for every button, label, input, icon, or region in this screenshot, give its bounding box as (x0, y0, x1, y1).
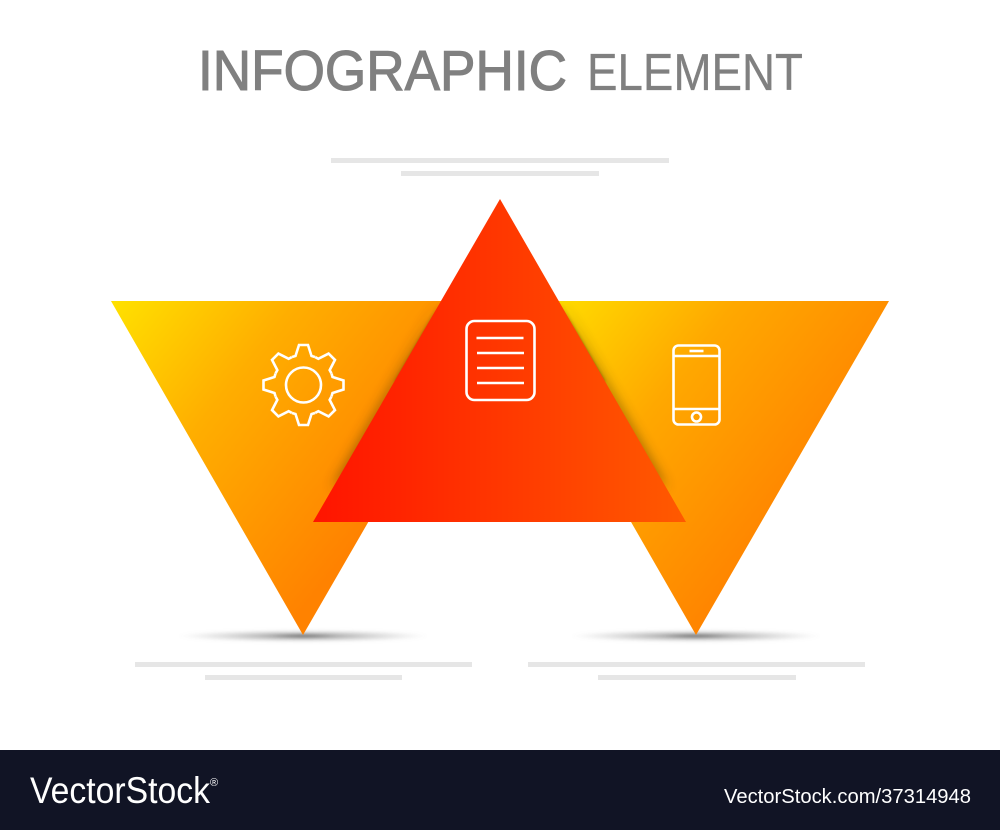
title: light word: ELEMENT (587, 44, 803, 102)
icon: document (466, 321, 534, 400)
footer image id: VectorStock.com/37314948 (724, 786, 971, 808)
ground shadow: left (178, 630, 428, 642)
text placeholder: bottom right (528, 662, 865, 680)
text placeholder: bottom left (135, 662, 472, 680)
panel: left orange triangle (111, 301, 441, 635)
title: bold word: INFOGRAPHIC (198, 39, 567, 103)
ground shadow: right (571, 630, 821, 642)
footer registered mark: ® (210, 777, 218, 789)
icon: gear (264, 345, 344, 425)
text placeholder: top (331, 158, 669, 176)
footer bar (0, 750, 1000, 830)
footer logo: VectorStock (30, 770, 210, 811)
panel: right orange triangle (558, 301, 889, 635)
title (198, 39, 803, 103)
panel: centre red triangle (313, 199, 686, 522)
icon: smartphone (674, 346, 720, 424)
